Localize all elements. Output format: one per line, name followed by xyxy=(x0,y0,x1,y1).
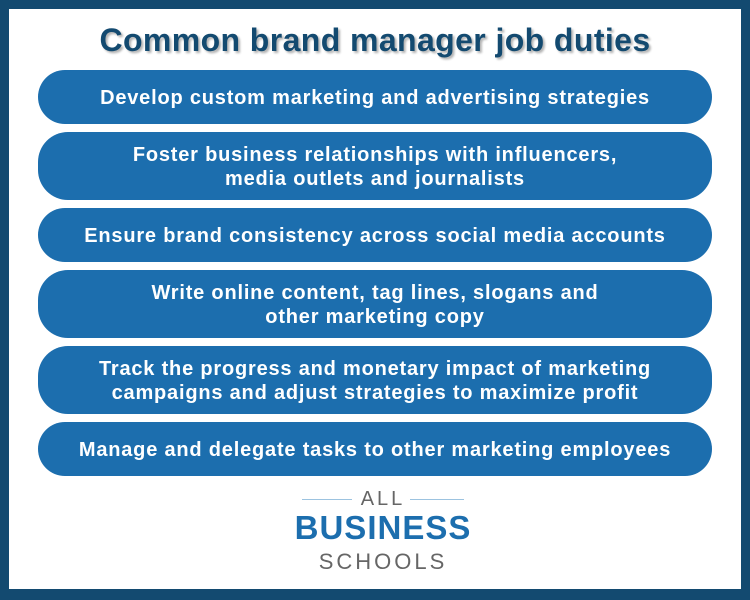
duty 6: Manage and delegate tasks to other marketing employees xyxy=(79,439,671,461)
duty 4: Write online content, tag lines, slogans and xyxy=(151,282,599,304)
duty 3: Ensure brand consistency across social media accounts xyxy=(84,225,666,247)
duty 6 xyxy=(38,422,712,476)
logo xyxy=(295,488,471,574)
logo: BUSINESS xyxy=(295,509,471,546)
title: Common brand manager job duties xyxy=(99,22,651,58)
duty 5 xyxy=(38,346,712,414)
duty 4 xyxy=(38,270,712,338)
duty 1: Develop custom marketing and advertising strategies xyxy=(100,87,650,109)
duty 5: campaigns and adjust strategies to maximize profit xyxy=(112,382,638,404)
duty 4: other marketing copy xyxy=(265,306,485,328)
duty 5: Track the progress and monetary impact of marketing xyxy=(99,358,651,380)
duty 2: Foster business relationships with influencers, xyxy=(133,144,617,166)
duty 2: media outlets and journalists xyxy=(225,168,525,190)
logo: ALL xyxy=(361,488,405,510)
duty 1 xyxy=(38,70,712,124)
duty 2 xyxy=(38,132,712,200)
duty 3 xyxy=(38,208,712,262)
logo: SCHOOLS xyxy=(319,549,447,574)
